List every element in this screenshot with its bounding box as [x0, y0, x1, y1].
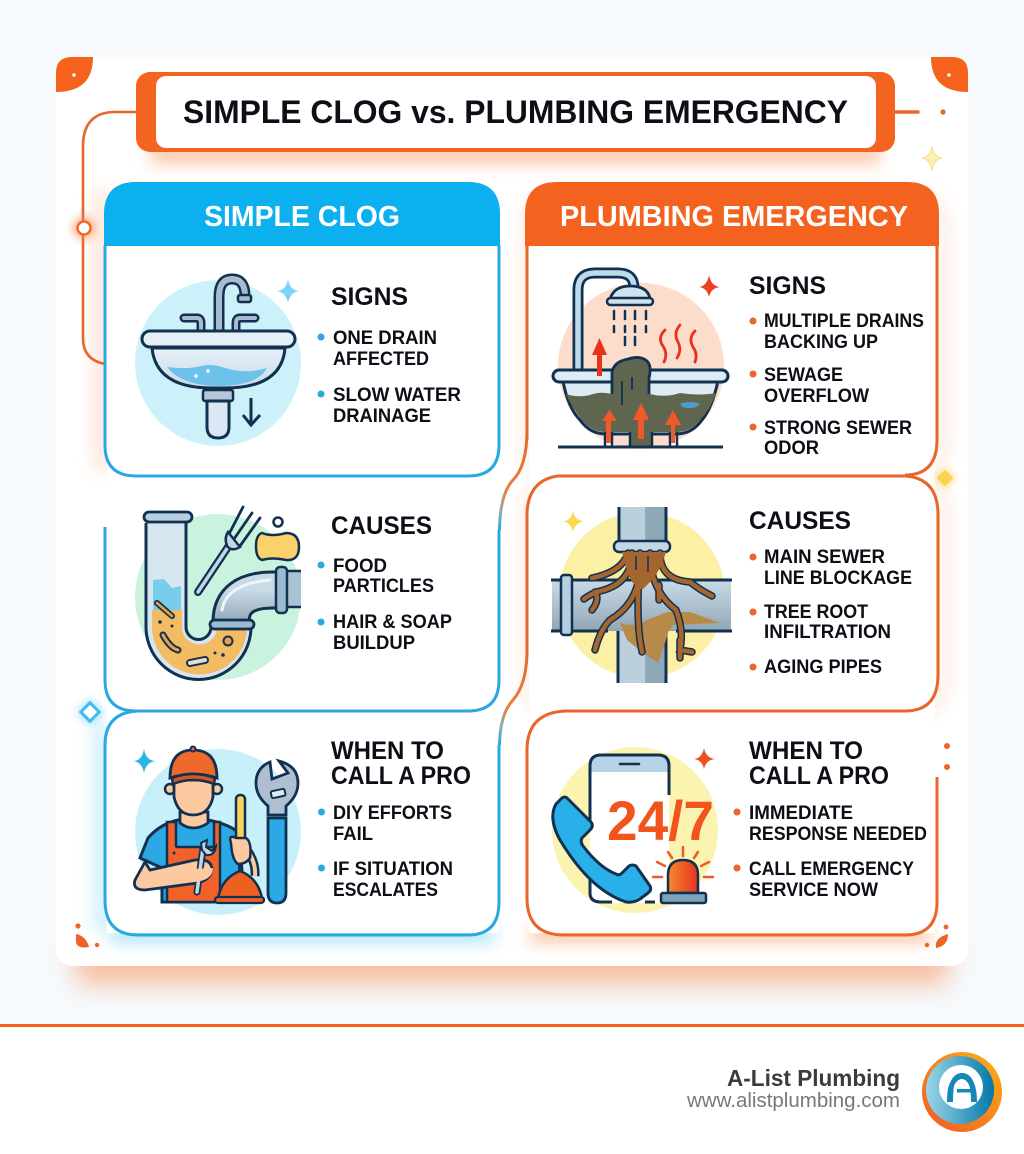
column connector: upper	[500, 430, 527, 530]
text: simple clog when to call a pro: DIY EFFORTS	[333, 802, 452, 824]
icon: tree roots in sewer pipe	[551, 507, 732, 683]
decoration: bottom left dots	[75, 923, 99, 947]
text: plumbing emergency when to call a pro: IMMEDIATE	[749, 802, 853, 824]
text: simple clog signs	[318, 283, 461, 427]
panel: plumbing emergency causes	[527, 476, 938, 711]
text: simple clog when to call a pro: ESCALATES	[333, 879, 438, 901]
text: plumbing emergency causes: TREE ROOT	[764, 601, 868, 623]
text: simple clog signs: DRAINAGE	[333, 405, 431, 427]
header: simple clog	[104, 182, 500, 246]
text: simple clog causes: PARTICLES	[333, 575, 434, 597]
connector node	[72, 216, 96, 240]
text: simple clog signs: ONE DRAIN	[333, 327, 437, 349]
title banner	[136, 72, 895, 152]
footer logo	[922, 1052, 1002, 1132]
text: simple clog signs: AFFECTED	[333, 348, 429, 370]
icon: sink	[135, 279, 301, 446]
glows behind panels	[94, 140, 946, 942]
text: simple clog when to call a pro: CALL A PRO	[331, 762, 471, 790]
text: plumbing emergency causes: LINE BLOCKAGE	[764, 567, 912, 589]
diamond: yellow	[934, 467, 956, 489]
text: plumbing emergency signs: SIGNS	[749, 272, 826, 300]
connector line: title to left column	[83, 112, 136, 364]
panel: simple clog when to call a pro	[105, 711, 499, 935]
text: plumbing emergency when to call a pro: CALL A PRO	[749, 762, 889, 790]
header: plumbing emergency: PLUMBING EMERGENCY	[560, 201, 908, 233]
panel: plumbing emergency signs	[525, 182, 939, 475]
diamond: blue	[76, 698, 104, 726]
text: plumbing emergency signs: BACKING UP	[764, 331, 878, 353]
sparkle: pale yellow	[921, 146, 943, 171]
text: simple clog when to call a pro: FAIL	[333, 823, 373, 845]
footer rule	[0, 1024, 1024, 1027]
connector stub: title right	[895, 109, 946, 115]
text: simple clog when to call a pro	[318, 737, 471, 901]
decoration: right dots	[944, 743, 950, 770]
text: plumbing emergency causes: MAIN SEWER	[764, 546, 885, 568]
text: plumbing emergency when to call a pro: SERVICE NOW	[749, 879, 879, 901]
icon: phone 24/7 and alarm	[552, 747, 718, 913]
text: plumbing emergency when to call a pro: RESPONSE NEEDED	[749, 823, 927, 845]
text: plumbing emergency when to call a pro: CALL EMERGENCY	[749, 858, 914, 880]
text: simple clog causes: FOOD	[333, 555, 387, 577]
text: simple clog signs: SLOW WATER	[333, 384, 461, 406]
24/7 label: 24/7	[607, 789, 714, 852]
icon: plumber	[133, 746, 301, 915]
panel: simple clog causes	[105, 507, 499, 711]
header: simple clog: SIMPLE CLOG	[204, 201, 400, 233]
text: plumbing emergency when to call a pro	[734, 737, 927, 901]
corner accent: top right	[931, 57, 968, 92]
text: plumbing emergency causes: INFILTRATION	[764, 621, 891, 643]
header: plumbing emergency	[525, 182, 939, 246]
panel: simple clog signs	[104, 182, 500, 476]
text: plumbing emergency signs	[749, 272, 924, 459]
text: simple clog causes	[318, 512, 452, 654]
icon: p-trap with fork and soap	[135, 507, 301, 680]
title text: SIMPLE CLOG vs. PLUMBING EMERGENCY	[183, 94, 848, 130]
text: simple clog when to call a pro: WHEN TO	[331, 737, 444, 765]
text: plumbing emergency signs: OVERFLOW	[764, 385, 870, 407]
footer brand text: A-List Plumbing	[727, 1065, 900, 1091]
footer brand text	[686, 1065, 900, 1112]
text: plumbing emergency signs: SEWAGE	[764, 364, 843, 386]
text: plumbing emergency signs: STRONG SEWER	[764, 417, 912, 439]
text: plumbing emergency signs: ODOR	[764, 437, 819, 459]
card: main white panel	[56, 57, 968, 966]
text: simple clog signs: SIGNS	[331, 283, 408, 311]
text: plumbing emergency causes: CAUSES	[749, 507, 851, 535]
panel: plumbing emergency when to call a pro	[527, 711, 937, 935]
corner accent: top left	[56, 57, 93, 92]
text: simple clog causes: CAUSES	[331, 512, 432, 540]
text: plumbing emergency causes: AGING PIPES	[764, 656, 882, 678]
text: simple clog when to call a pro: IF SITUATION	[333, 858, 453, 880]
panel backing: white column interiors	[107, 250, 935, 933]
text: plumbing emergency signs: MULTIPLE DRAINS	[764, 310, 924, 332]
text: simple clog causes: HAIR & SOAP	[333, 611, 452, 633]
decoration: bottom right dots	[925, 925, 948, 948]
text: plumbing emergency causes	[749, 507, 912, 678]
text: plumbing emergency when to call a pro: WHEN TO	[749, 737, 863, 765]
text: simple clog causes: BUILDUP	[333, 632, 415, 654]
column connector: lower	[500, 650, 527, 745]
icon: overflowing bathtub	[553, 273, 728, 449]
footer brand text: www.alistplumbing.com	[686, 1090, 900, 1112]
